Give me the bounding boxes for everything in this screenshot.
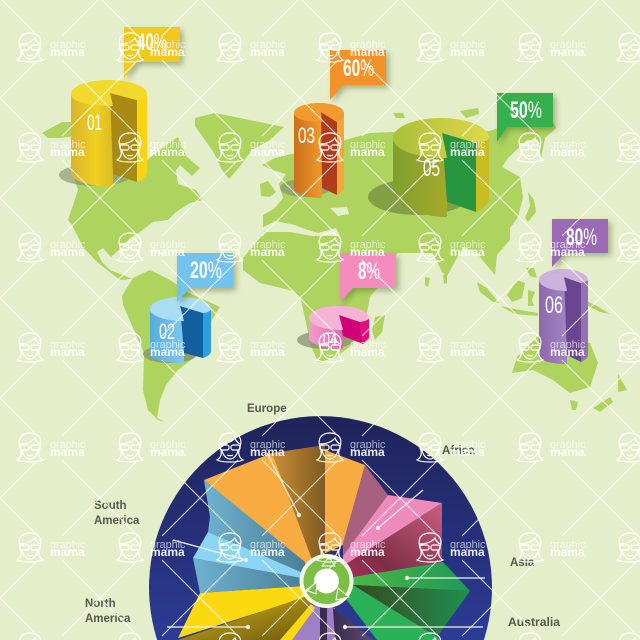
callout 50% xyxy=(497,93,553,142)
watermark text: mama xyxy=(50,245,85,259)
watermark text: graphic xyxy=(450,339,486,351)
leader lines xyxy=(167,453,485,629)
watermark text: mama xyxy=(250,445,285,459)
watermark text: graphic xyxy=(550,239,586,251)
number 05: 05 xyxy=(423,155,440,182)
watermark text: graphic xyxy=(150,39,186,51)
watermark text: mama xyxy=(250,145,285,159)
watermark text: graphic xyxy=(550,439,586,451)
label: North America: America xyxy=(85,613,131,625)
watermark text: mama xyxy=(550,45,585,59)
watermark text: mama xyxy=(450,345,485,359)
watermark text: graphic xyxy=(250,39,286,51)
watermark text: graphic xyxy=(550,339,586,351)
label: South America: America xyxy=(94,515,140,527)
watermark text: graphic xyxy=(150,539,186,551)
callout 60%: 60% xyxy=(343,55,374,82)
cylinder 02 blue xyxy=(143,297,211,363)
watermark text: mama xyxy=(250,45,285,59)
watermark text: graphic xyxy=(50,139,86,151)
segment: orange xyxy=(204,445,365,566)
watermark text: graphic xyxy=(50,239,86,251)
watermark text: graphic xyxy=(50,439,86,451)
callout 20% xyxy=(177,253,233,302)
watermark text: graphic xyxy=(350,339,386,351)
watermark text: graphic xyxy=(450,539,486,551)
label: Australia: Australia xyxy=(508,617,561,629)
watermark text: mama xyxy=(550,545,585,559)
watermark text: mama xyxy=(350,145,385,159)
watermark text: graphic xyxy=(550,139,586,151)
segment: blue xyxy=(193,480,305,593)
watermark text: mama xyxy=(250,245,285,259)
watermark text: mama xyxy=(450,445,485,459)
watermark text: graphic xyxy=(250,539,286,551)
cylinder 05 green xyxy=(368,118,489,217)
cylinder 01 yellow xyxy=(59,80,147,187)
watermark text: mama xyxy=(550,445,585,459)
watermark text: mama xyxy=(150,145,185,159)
world map xyxy=(42,108,627,422)
watermark text: graphic xyxy=(250,439,286,451)
number 02: 02 xyxy=(159,319,175,344)
watermark text: graphic xyxy=(150,239,186,251)
watermark text: mama xyxy=(450,45,485,59)
watermark text: graphic xyxy=(150,139,186,151)
callout 40%: 40% xyxy=(137,29,167,56)
watermark text: graphic xyxy=(150,339,186,351)
number 06: 06 xyxy=(545,292,563,319)
watermark text: graphic xyxy=(350,139,386,151)
watermark text: graphic xyxy=(450,139,486,151)
label: South America: South xyxy=(94,500,127,512)
segment: green xyxy=(343,562,470,640)
watermark text: graphic xyxy=(450,39,486,51)
cylinder 03 orange xyxy=(280,103,344,198)
watermark text xyxy=(50,39,586,559)
segment: pink xyxy=(343,465,442,577)
segment: yellow xyxy=(178,586,315,640)
watermark text: mama xyxy=(350,445,385,459)
radial chart xyxy=(149,416,492,640)
watermark text: graphic xyxy=(250,139,286,151)
label: Africa: Africa xyxy=(442,445,475,457)
watermark text: mama xyxy=(450,145,485,159)
watermark text: graphic xyxy=(350,239,386,251)
watermark text: graphic xyxy=(50,339,86,351)
watermark text: mama xyxy=(450,245,485,259)
watermark text: graphic xyxy=(550,539,586,551)
watermark text: mama xyxy=(50,345,85,359)
watermark text: graphic xyxy=(550,39,586,51)
callout 50%: 50% xyxy=(510,97,542,124)
label: Europe: Europe xyxy=(247,403,287,415)
number 01: 01 xyxy=(87,110,102,135)
watermark text: mama xyxy=(150,245,185,259)
watermark text: graphic xyxy=(350,39,386,51)
callout 40% xyxy=(124,27,180,78)
inland seas xyxy=(262,207,349,236)
segment: purple xyxy=(287,604,373,640)
cylinder 06 purple xyxy=(539,269,588,364)
number 04: 04 xyxy=(323,330,337,351)
watermark text: mama xyxy=(550,245,585,259)
number 03: 03 xyxy=(298,123,315,148)
watermark text: graphic xyxy=(250,239,286,251)
label: North America: North xyxy=(85,598,116,610)
watermark text: mama xyxy=(50,45,85,59)
watermark text: mama xyxy=(50,445,85,459)
cylinder 04 pink xyxy=(297,306,369,351)
watermark text: mama xyxy=(350,45,385,59)
watermark text: graphic xyxy=(50,39,86,51)
watermark text: mama xyxy=(550,145,585,159)
callout 80%: 80% xyxy=(566,224,597,251)
watermark text: graphic xyxy=(350,539,386,551)
callout 8%: 8% xyxy=(358,258,380,285)
watermark text: mama xyxy=(50,145,85,159)
watermark text: mama xyxy=(350,345,385,359)
watermark text: graphic xyxy=(50,539,86,551)
watermark text: graphic xyxy=(450,239,486,251)
centre recycling icon xyxy=(300,554,354,608)
callout 80% xyxy=(552,219,608,267)
watermark text: mama xyxy=(250,545,285,559)
watermark text: mama xyxy=(350,545,385,559)
watermark text: mama xyxy=(150,445,185,459)
watermark text: graphic xyxy=(150,439,186,451)
watermark text: graphic xyxy=(250,339,286,351)
watermark text: mama xyxy=(150,45,185,59)
watermark text: graphic xyxy=(350,439,386,451)
callout 60% xyxy=(330,50,386,100)
watermark text: mama xyxy=(150,545,185,559)
watermark text: mama xyxy=(350,245,385,259)
callout 8% xyxy=(340,253,396,302)
watermark text: mama xyxy=(50,545,85,559)
callout 20%: 20% xyxy=(190,257,222,284)
watermark text: graphic xyxy=(450,439,486,451)
watermark text: mama xyxy=(550,345,585,359)
watermark text: mama xyxy=(450,545,485,559)
label: Asia: Asia xyxy=(510,557,535,569)
watermark text: mama xyxy=(250,345,285,359)
watermark text: mama xyxy=(150,345,185,359)
